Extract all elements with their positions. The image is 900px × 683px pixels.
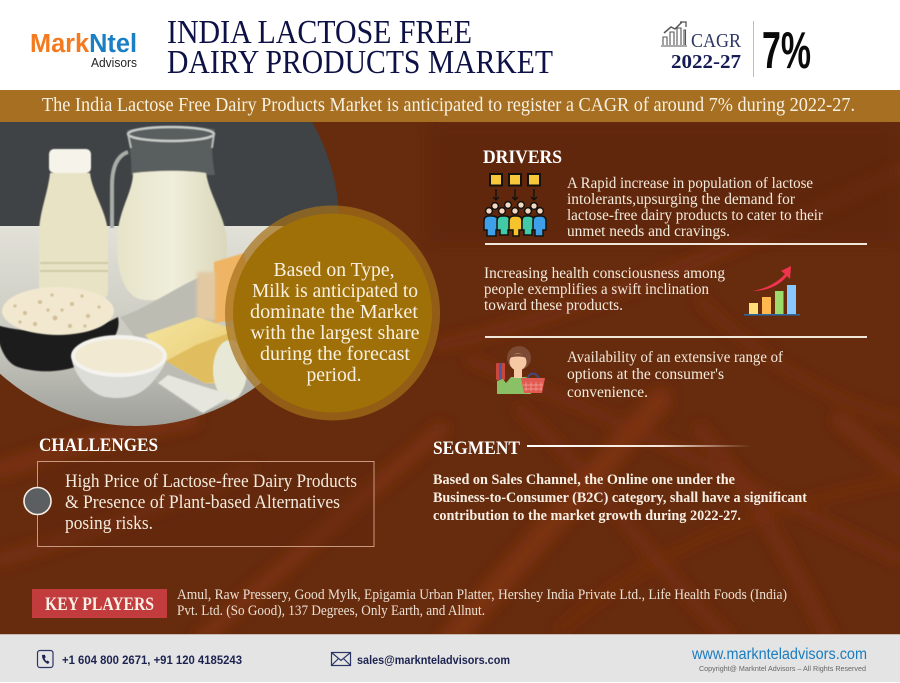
logo: MarkNtel Advisors — [30, 30, 137, 70]
driver text: extensive range — [567, 349, 784, 401]
foil wrapper bottom — [158, 375, 233, 413]
icon: shopper with basket — [496, 346, 545, 394]
icon: rising bar chart — [661, 22, 687, 46]
summary band — [0, 90, 900, 122]
title: INDIA LACTOSE FREE — [167, 14, 472, 51]
segment text: Based on Sales Channel, the Online one under the — [433, 472, 736, 488]
challenge text: High Price of Lactose-free Dairy Products — [65, 472, 357, 492]
CAGR callout: 2022-27 — [671, 51, 741, 73]
driver text: lactose intolerance: A Rapid increase in population of lactose — [567, 175, 813, 192]
white bowl of cream — [71, 335, 167, 398]
callout: milk dominates by type: Based on Type, — [274, 259, 394, 281]
website: www.marknteladvisors.com — [691, 646, 867, 663]
logo: MarkNtel Advisors: Advisors — [91, 55, 137, 70]
CAGR callout — [661, 21, 811, 80]
driver text: extensive range: options at the consumer's — [567, 366, 724, 383]
title — [167, 14, 553, 81]
phone numbers: +1 604 800 2671, +91 120 4185243 — [62, 655, 242, 667]
segment text — [433, 472, 807, 524]
icon: rising bars with arrow — [744, 266, 800, 316]
key players list: Amul, Raw Pressery, Good Mylk, Epigamia Urban Platter, Hershey India Private Ltd., Life Health Foods (India) — [177, 587, 787, 603]
foil wrapper — [120, 275, 240, 413]
challenge box — [38, 462, 374, 546]
logo: MarkNtel Advisors: MarkNtel — [30, 30, 137, 58]
panel: segment — [433, 438, 807, 524]
header panel — [0, 0, 900, 90]
black bowl with cottage cheese — [0, 287, 119, 371]
key players list — [177, 587, 787, 619]
key players label: KEY PLAYERS — [45, 595, 154, 615]
panel: challenges — [24, 435, 374, 546]
callout: milk dominates by type: Milk is anticipated to — [252, 280, 418, 302]
footer — [0, 634, 900, 682]
callout: milk dominates by type: during the forecast — [260, 343, 410, 365]
driver text: health consciousness — [484, 265, 725, 314]
orange cheese block — [214, 252, 246, 324]
driver text: extensive range: convenience. — [567, 384, 648, 401]
callout: milk dominates by type: period. — [306, 364, 362, 386]
driver text: lactose intolerance: lactose-free dairy products to cater to their — [567, 207, 824, 224]
callout: milk dominates by type — [225, 206, 440, 420]
challenge text — [65, 472, 357, 534]
title: DAIRY PRODUCTS MARKET — [167, 44, 553, 81]
bottle of milk — [39, 149, 108, 301]
heading: challenges: CHALLENGES — [39, 435, 158, 456]
icon: consumers with products — [484, 174, 546, 236]
CAGR callout: 7% — [762, 22, 811, 80]
heading: drivers: DRIVERS — [483, 148, 562, 168]
icon: envelope — [332, 652, 350, 666]
challenge text: posing risks. — [65, 514, 153, 534]
heading: segment: SEGMENT — [433, 438, 520, 459]
key players list: Pvt. Ltd. (So Good), 137 Degrees, Only Earth, and Allnut. — [177, 603, 485, 619]
bullet circle — [24, 488, 51, 514]
herbed cheese — [213, 340, 247, 400]
background panel — [0, 122, 900, 640]
driver text: lactose intolerance — [567, 175, 824, 240]
driver text: lactose intolerance: intolerants,upsurging the demand for — [567, 191, 796, 208]
copyright: Copyright@ Markntel Advisors – All Rights Reserved — [699, 664, 866, 673]
email address: sales@marknteladvisors.com — [357, 655, 510, 667]
CAGR callout: CAGR — [691, 30, 742, 52]
panel: key players — [32, 587, 787, 619]
segment text: contribution to the market growth during 2022-27. — [433, 508, 741, 524]
challenge text: & Presence of Plant-based Alternatives — [65, 493, 340, 513]
driver text: health consciousness: Increasing health consciousness among — [484, 265, 725, 282]
driver text: health consciousness: people exemplifies a swift inclination — [484, 281, 709, 298]
driver text: health consciousness: toward these products. — [484, 297, 623, 314]
driver text: extensive range: Availability of an extensive range of — [567, 349, 784, 366]
key players label — [32, 589, 167, 618]
butter block — [145, 317, 237, 385]
dairy products photo — [0, 122, 360, 436]
segment text: Business-to-Consumer (B2C) category, shall have a significant — [433, 490, 807, 506]
callout: milk dominates by type: dominate the Market — [250, 301, 418, 323]
glass jug of milk — [112, 126, 227, 300]
driver text: lactose intolerance: unmet needs and cravings. — [567, 223, 730, 240]
icon: phone — [38, 650, 53, 668]
panel: drivers — [483, 148, 867, 401]
callout: milk dominates by type: with the largest share — [250, 322, 420, 344]
